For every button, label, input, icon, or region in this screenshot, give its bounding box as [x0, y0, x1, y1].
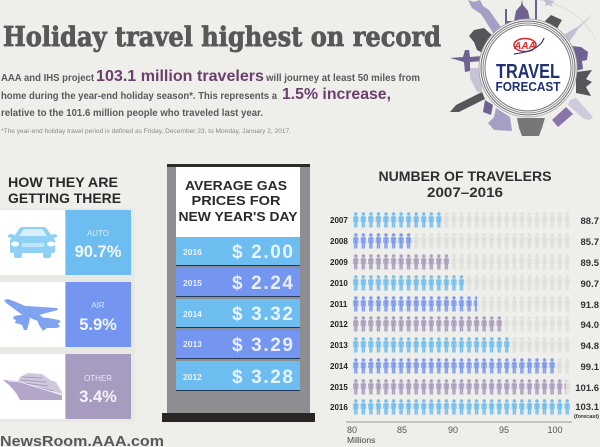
axis: 95	[499, 425, 509, 435]
intro text: 103.1 million travelers	[96, 68, 264, 85]
row 2008	[330, 233, 599, 249]
light left tower	[470, 68, 482, 92]
row 2007: 88.7	[580, 216, 599, 227]
gas row 2016: $ 2.00	[232, 242, 293, 263]
other row: OTHER	[84, 374, 112, 383]
row 2009: 2009	[330, 258, 348, 267]
axis: Millions	[347, 435, 375, 445]
auto row: AUTO	[87, 229, 109, 238]
row 2013: 94.8	[580, 341, 599, 352]
purple temple	[572, 46, 588, 71]
air row: AIR	[91, 301, 105, 310]
auto row: 90.7%	[75, 243, 122, 261]
row 2008: 2008	[330, 237, 348, 246]
heading: number of travelers: NUMBER OF TRAVELERS	[378, 169, 552, 184]
dark colosseum	[469, 28, 494, 53]
gas row 2012	[176, 361, 300, 391]
intro text: home during the year-end holiday season*. This represents a	[1, 91, 277, 102]
row 2015: 101.6	[575, 383, 599, 394]
axis: 90	[448, 425, 458, 435]
row 2013	[330, 337, 599, 353]
gas row 2014: $ 3.32	[232, 304, 293, 325]
axis	[346, 422, 572, 445]
row 2015	[330, 379, 599, 395]
rings	[479, 19, 577, 117]
axis: 80	[347, 425, 357, 435]
row 2012: 2012	[330, 320, 348, 329]
row 2014: 99.1	[580, 362, 600, 373]
intro text: will journey at least 50 miles from	[265, 73, 420, 84]
gas row 2012: $ 3.28	[232, 367, 293, 388]
icon: plane	[4, 299, 61, 331]
air row: 5.9%	[79, 316, 117, 334]
other row: 3.4%	[79, 388, 117, 406]
row 2010: 2010	[330, 279, 348, 288]
heading: how they are getting there: HOW THEY ARE	[8, 174, 118, 190]
gas heading: AVERAGE GAS	[185, 179, 287, 193]
row 2012	[330, 316, 599, 332]
statue	[468, 0, 503, 36]
intro text: AAA and IHS project	[1, 73, 95, 84]
gas heading	[178, 179, 298, 224]
row 2011: 2011	[330, 300, 348, 309]
gas row 2015: $ 2.24	[232, 273, 293, 294]
small plane	[543, 0, 555, 7]
logo text: TRAVEL	[496, 61, 560, 83]
row 2009: 89.5	[580, 258, 600, 269]
gas row 2014: 2014	[183, 309, 202, 319]
pen	[450, 92, 485, 112]
intro text: 1.5% increase,	[282, 86, 391, 103]
axis: 100	[547, 425, 563, 435]
row 2010	[330, 275, 599, 291]
christ statue	[450, 50, 482, 72]
grey building	[517, 118, 545, 136]
taj mahal	[505, 0, 537, 28]
gas heading: PRICES FOR	[192, 194, 280, 208]
heading: number of travelers: 2007–2016	[427, 185, 504, 200]
heading: how they are getting there: GETTING THERE	[8, 190, 121, 206]
axis: 85	[397, 425, 407, 435]
light lower building	[488, 108, 512, 131]
chart: travelers pictogram	[330, 212, 600, 445]
icon: car	[8, 227, 57, 258]
row 2012: 94.0	[580, 320, 599, 331]
heading: how they are getting there	[8, 174, 121, 206]
row 2009	[330, 254, 600, 270]
icon: ship	[3, 373, 62, 400]
eiffel tower	[562, 12, 595, 43]
heading: number of travelers	[378, 169, 552, 200]
logo: travel forecast: AAA	[513, 41, 536, 52]
panel: gas prices	[162, 164, 315, 422]
gas row 2015	[176, 268, 300, 297]
row 2015: 2015	[330, 383, 348, 392]
logo: travel forecast	[450, 0, 596, 136]
gas row 2013	[176, 330, 300, 359]
row 2013: 2013	[330, 341, 348, 350]
row 2008: 85.7	[580, 237, 599, 248]
gas row 2015: 2015	[183, 278, 202, 288]
landmark silhouettes	[450, 0, 596, 136]
row 2016: 2016	[330, 403, 348, 412]
gas row 2014	[176, 299, 300, 328]
row 2014: 2014	[330, 362, 348, 371]
row 2010: 90.7	[580, 279, 599, 290]
row 2016	[330, 399, 600, 420]
logo: travel forecast: FORECAST	[496, 80, 561, 94]
gas row 2013: $ 3.29	[232, 335, 293, 356]
row 2011	[330, 296, 599, 312]
row 2014	[330, 358, 600, 374]
row 2007: 2007	[330, 216, 348, 225]
panel: transport modes	[0, 208, 135, 422]
title: Holiday travel highest on record	[3, 22, 441, 53]
gas row 2013: 2013	[183, 339, 202, 349]
dark crown	[576, 70, 592, 96]
purple lower	[483, 100, 493, 115]
gas heading: NEW YEAR'S DAY	[178, 210, 298, 224]
auto row	[0, 210, 131, 275]
row 2016: (forecast)	[574, 414, 599, 420]
intro text	[1, 68, 420, 119]
light tower	[568, 98, 593, 120]
footnote: *The year-end holiday travel period is defined as Friday, December 23, to Monday, January 2, 2017.	[1, 128, 291, 135]
gas row 2012: 2012	[183, 372, 202, 382]
row 2016: 103.1	[575, 402, 600, 413]
gas row 2016: 2016	[183, 247, 202, 257]
air row	[0, 282, 131, 347]
AAA oval	[514, 38, 536, 52]
dark building	[545, 15, 562, 31]
row 2011: 91.8	[580, 300, 599, 311]
intro text: relative to the 101.6 million people who traveled last year.	[1, 108, 263, 119]
row 2007	[330, 212, 599, 228]
other row	[0, 354, 131, 419]
gas row 2016	[176, 237, 300, 266]
purple grid building	[552, 107, 573, 127]
